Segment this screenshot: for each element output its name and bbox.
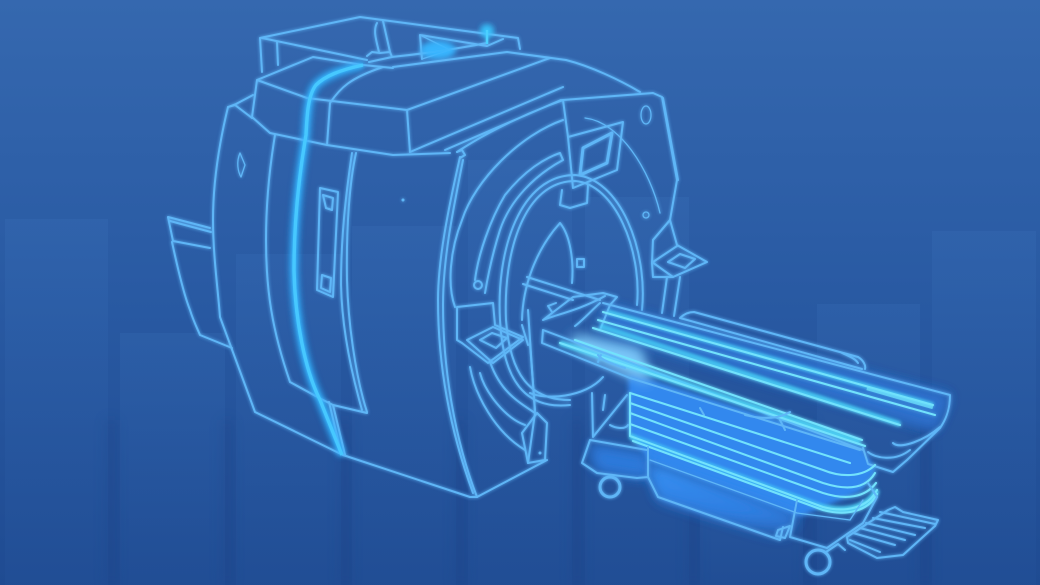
glowing body stripe <box>294 65 363 455</box>
pillow rail <box>680 312 865 369</box>
table glow <box>630 375 875 515</box>
main body panels <box>213 107 547 497</box>
gantry face and arcs <box>410 87 678 463</box>
support leg <box>522 325 547 463</box>
rear bracket <box>168 217 232 348</box>
top glow accents <box>421 25 493 58</box>
bar chart backdrop <box>5 160 1036 585</box>
table base stack <box>630 393 850 463</box>
base blocks <box>582 440 877 548</box>
foot pedals <box>847 507 938 558</box>
table top <box>603 303 950 472</box>
right bracket <box>641 106 707 316</box>
wheel: left <box>600 477 620 497</box>
top housing box <box>260 17 520 72</box>
hose and pedestal <box>530 377 628 437</box>
side control handle <box>317 188 338 297</box>
left bracket <box>457 303 523 363</box>
patient table <box>530 293 950 574</box>
monitor <box>560 100 623 208</box>
head coil <box>543 293 617 330</box>
hood <box>228 52 640 155</box>
MRI scanner <box>168 17 950 574</box>
wheel: right <box>806 544 845 574</box>
